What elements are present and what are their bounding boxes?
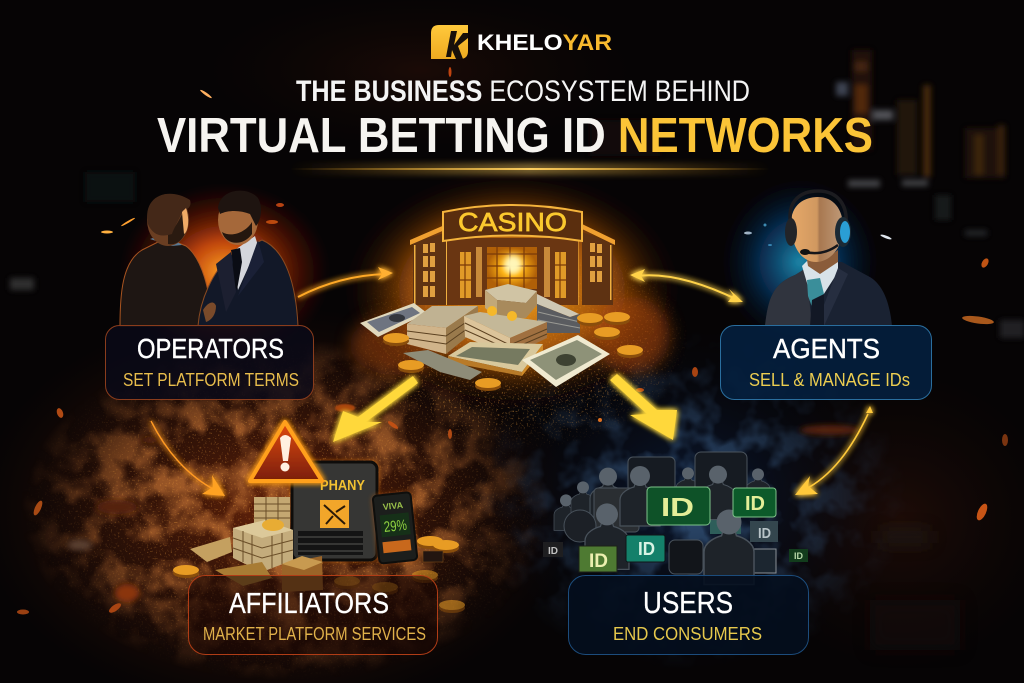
panel: agents: [720, 326, 932, 400]
silhouettes front row: [564, 466, 754, 584]
right man: [198, 191, 298, 326]
glow: casino: [347, 175, 677, 405]
left stack: [407, 306, 478, 354]
banded stack: [448, 342, 543, 376]
operators description: SET PLATFORM TERMS: [123, 369, 299, 390]
ID badges: ID: [745, 493, 765, 515]
illustration: agent: [765, 191, 892, 326]
illustration: operators handshake: [120, 191, 298, 326]
arrow: operators to casino: [298, 267, 393, 297]
title: [157, 75, 873, 163]
ID badges: ID: [794, 551, 804, 561]
illustration: casino: CASINO: [458, 207, 567, 237]
ID badges: ID: [548, 546, 558, 557]
ID badges: ID: [589, 551, 608, 572]
top stack: [485, 284, 537, 318]
lower bill: [403, 350, 482, 380]
casino sign: [443, 205, 582, 241]
gold bricks: [233, 497, 323, 592]
glow: casino ground right: [594, 297, 670, 373]
entrance light: [487, 247, 537, 289]
skyline: [10, 50, 1024, 338]
bill right: [522, 335, 610, 387]
panel: operators: [106, 326, 314, 400]
bill left: [360, 303, 427, 337]
ID badges: [543, 487, 808, 572]
right wing: [582, 232, 613, 305]
bills and coins: [173, 536, 459, 586]
wordmark: KHELO YAR: [477, 30, 612, 55]
side device: VIVA: [382, 500, 404, 512]
tablet: [292, 462, 377, 560]
affiliators label: AFFILIATORS: [229, 588, 389, 620]
title line 2: VIRTUAL BETTING ID NETWORKS: [157, 109, 873, 163]
warning triangle: [250, 422, 322, 481]
embers: [17, 67, 1008, 614]
glow: operators: [120, 184, 330, 360]
side device: 29%: [383, 517, 408, 536]
building front: [447, 238, 578, 305]
illustration: affiliators assets: [173, 422, 465, 613]
agents label: AGENTS: [773, 333, 880, 364]
ID badges: ID: [661, 492, 694, 522]
grey stack: [537, 294, 580, 333]
left wing: [413, 232, 447, 305]
glow: casino ground left: [350, 315, 440, 375]
arrow: operators to affiliators: [151, 421, 225, 496]
center stack: [464, 306, 547, 356]
affiliators description: MARKET PLATFORM SERVICES: [203, 624, 426, 644]
agents description: SELL & MANAGE IDs: [749, 369, 910, 390]
headset: [790, 191, 846, 226]
coins: [604, 312, 630, 325]
users description: END CONSUMERS: [613, 624, 762, 644]
illustration: users crowd: [543, 452, 808, 584]
left man: [120, 194, 213, 326]
suit: [765, 262, 892, 326]
silhouettes back row: [554, 467, 770, 530]
arrow: agents to users: [795, 406, 873, 495]
side device: [373, 492, 417, 564]
ID badges: ID: [638, 539, 655, 559]
users label: USERS: [643, 585, 733, 620]
arrow: casino to affiliators: [333, 376, 418, 442]
glow: agents: [720, 177, 880, 347]
illustration: casino: [410, 205, 615, 305]
ID badges: ID: [758, 525, 771, 542]
panel: affiliators: [188, 576, 438, 654]
icon: K mark: [431, 25, 468, 59]
small windows: [460, 252, 471, 298]
dim coins: [334, 570, 465, 613]
panel: users: [568, 576, 808, 654]
operators label: OPERATORS: [137, 333, 284, 364]
tablet: PHANY: [320, 477, 365, 494]
title line 1: THE BUSINESS ECOSYSTEM BEHIND: [296, 75, 750, 108]
face: [791, 197, 843, 262]
arrow: casino to users: [610, 374, 677, 440]
neck: [806, 250, 838, 274]
lower right haze: [870, 530, 960, 650]
logo: [431, 25, 612, 59]
handshake: [203, 303, 216, 322]
illustration: money pile: [360, 284, 643, 391]
arrow: casino to agents: [630, 269, 743, 302]
back panels: [594, 452, 776, 574]
